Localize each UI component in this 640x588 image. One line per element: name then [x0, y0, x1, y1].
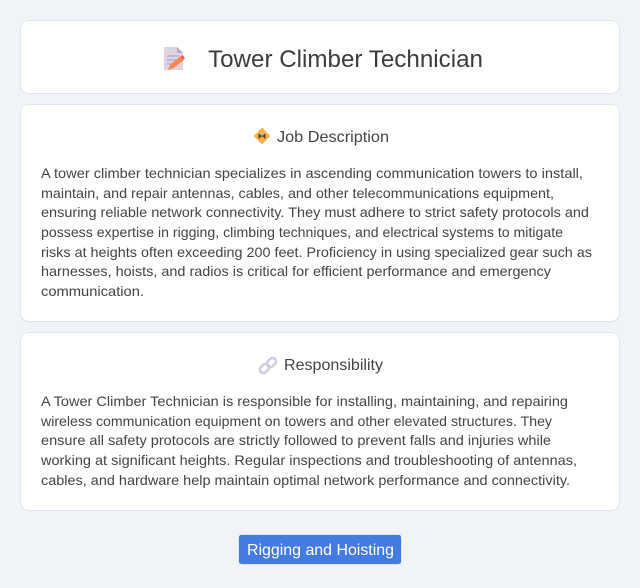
- panel: responsibility: [20, 332, 620, 510]
- text block: responsibility: working at significant heights. Regular inspections and troubleshooting of antennas,: [40, 452, 577, 468]
- tag button: rigging and hoisting: [238, 534, 402, 564]
- heading: responsibility: Responsibility: [284, 357, 383, 374]
- panel: job description: [20, 104, 620, 322]
- text block: responsibility: wireless communication equipment on towers and other elevated structures. They: [40, 413, 552, 429]
- text block: responsibility: [40, 393, 577, 488]
- text block: responsibility: ensure all safety protocols are strictly followed to prevent falls and injuries while: [41, 432, 551, 448]
- icon: chain link: [258, 356, 278, 375]
- text block: job description: harnesses, hoists, and radios is critical for efficient performance and emergency: [41, 263, 551, 279]
- tag button: rigging and hoisting: Rigging and Hoisting: [247, 542, 394, 559]
- icon: document with pencil: [164, 47, 185, 70]
- text block: job description: possess expertise in rigging, climbing techniques, and electrical systems to mitigate: [41, 224, 563, 240]
- icon: diamond warning sign: [254, 128, 270, 144]
- text block: job description: communication.: [41, 283, 144, 299]
- text block: responsibility: cables, and hardware help maintain optimal network performance and connectivity.: [41, 472, 570, 488]
- text block: job description: maintain, and repair antennas, cables, and other telecommunications equipment,: [41, 185, 554, 201]
- text block: job description: risks at heights often exceeding 200 feet. Proficiency in using specialized gear such as: [41, 244, 592, 260]
- text block: job description: [41, 165, 592, 299]
- text block: job description: A tower climber technician specializes in ascending communication towers to install,: [41, 165, 583, 181]
- title text: Tower Climber Technician: [208, 46, 483, 73]
- text block: responsibility: A Tower Climber Technician is responsible for installing, maintaining, and repairing: [41, 393, 568, 409]
- heading: job description: Job Description: [277, 129, 389, 146]
- panel: title: [20, 20, 620, 94]
- text block: job description: ensuring reliable network connectivity. They must adhere to strict safety protocols and: [41, 204, 589, 220]
